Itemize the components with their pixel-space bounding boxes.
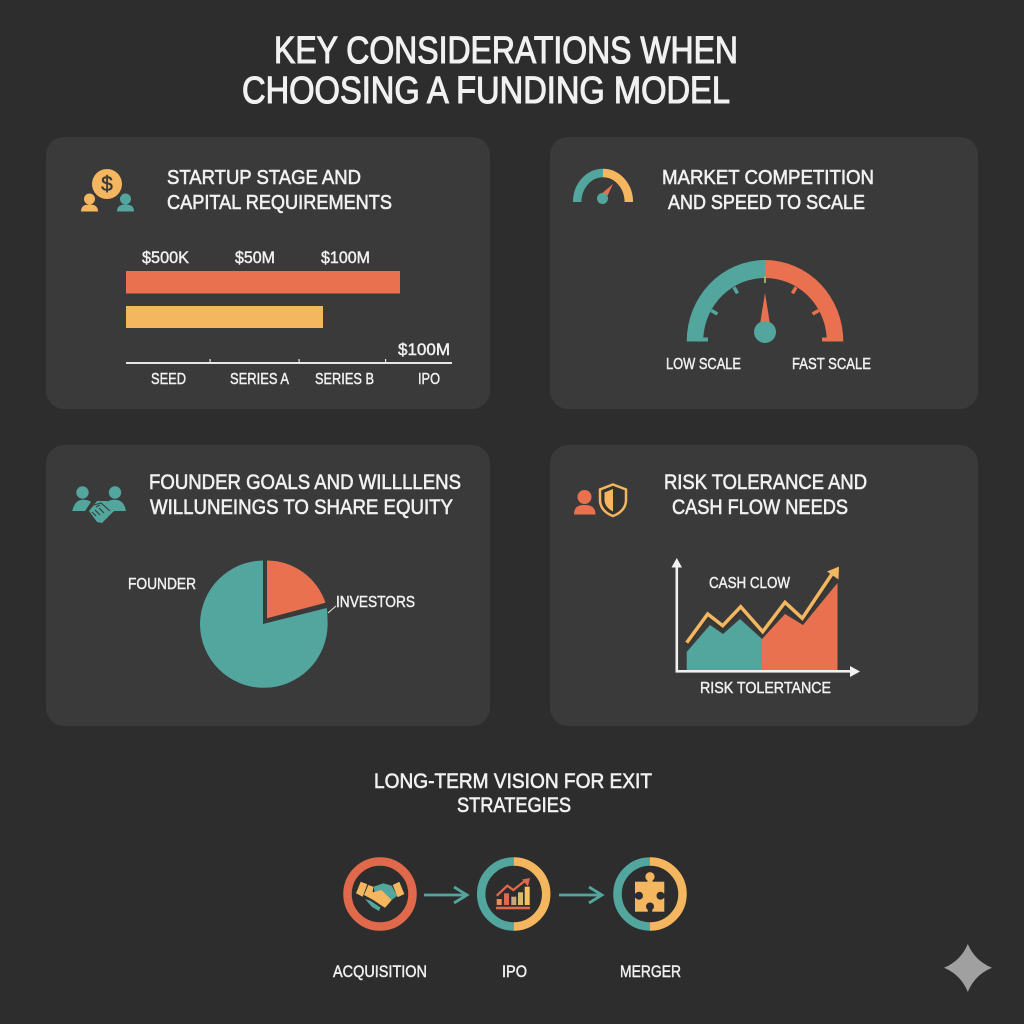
icon: small gauge xyxy=(577,173,629,204)
title xyxy=(242,30,738,112)
title: KEY CONSIDERATIONS WHEN xyxy=(274,30,738,72)
icon: person and shield xyxy=(574,484,626,516)
area chart: cash flow and risk xyxy=(672,558,860,697)
bar chart: capital requirements: $500K xyxy=(142,248,190,267)
bar chart: capital requirements: $100M xyxy=(398,340,450,359)
heading: AND SPEED TO SCALE xyxy=(668,191,865,214)
icon: merger puzzle piece xyxy=(618,862,682,926)
bar chart: capital requirements: SEED xyxy=(151,371,186,388)
panel background xyxy=(550,445,978,726)
bar chart: capital requirements: IPO xyxy=(418,371,440,388)
icon: dollar coin and people: $ xyxy=(101,173,113,196)
heading: FOUNDER GOALS AND WILLLLENS xyxy=(149,471,461,494)
arrow: acquisition to IPO xyxy=(424,887,467,903)
label: merger: MERGER xyxy=(620,963,681,981)
gauge chart: speed to scale: LOW SCALE xyxy=(666,356,741,373)
icon: dollar coin and people xyxy=(81,169,134,212)
heading: WILLUNEINGS TO SHARE EQUITY xyxy=(150,496,453,519)
bar chart: capital requirements: $100M xyxy=(321,248,370,267)
heading xyxy=(662,166,874,214)
area chart: cash flow and risk: RISK TOLERTANCE xyxy=(700,680,831,697)
heading: STARTUP STAGE AND xyxy=(167,166,361,189)
heading: RISK TOLERANCE AND xyxy=(664,471,867,494)
title: CHOOSING A FUNDING MODEL xyxy=(242,70,730,112)
panel: startup stage xyxy=(46,137,490,409)
heading: LONG-TERM VISION FOR EXIT xyxy=(374,770,652,793)
icon: people shaking hands xyxy=(72,486,126,523)
bar chart: capital requirements: $50M xyxy=(235,248,275,267)
founder slice xyxy=(200,560,328,688)
icon: acquisition handshake xyxy=(348,862,412,926)
bar chart: capital requirements xyxy=(126,248,452,388)
gauge chart: speed to scale: FAST SCALE xyxy=(792,356,871,373)
arrow: IPO to merger xyxy=(559,887,602,903)
pie chart: equity split: FOUNDER xyxy=(128,576,196,593)
heading xyxy=(374,770,652,817)
label: acquisition: ACQUISITION xyxy=(333,963,427,981)
icon: IPO growth chart xyxy=(481,862,546,926)
heading: MARKET COMPETITION xyxy=(662,166,874,189)
gauge chart: speed to scale xyxy=(666,260,871,373)
label: IPO: IPO xyxy=(502,963,527,981)
heading: STRATEGIES xyxy=(457,794,571,817)
section: exit strategies xyxy=(333,770,682,981)
heading xyxy=(664,471,867,519)
panel background xyxy=(550,137,978,409)
heading xyxy=(167,166,392,214)
pie chart: equity split: INVESTORS xyxy=(336,594,415,611)
panel background xyxy=(46,137,490,409)
bar chart: capital requirements: SERIES B xyxy=(315,371,374,388)
heading xyxy=(149,471,461,519)
heading: CASH FLOW NEEDS xyxy=(672,496,848,519)
area chart: cash flow and risk: CASH CLOW xyxy=(709,575,791,592)
heading: CAPITAL REQUIREMENTS xyxy=(167,191,392,214)
investors slice xyxy=(267,560,326,618)
bar chart: capital requirements: SERIES A xyxy=(230,371,289,388)
panel: risk tolerance xyxy=(550,445,978,726)
pie chart: equity split xyxy=(128,560,415,688)
icon: sparkle watermark xyxy=(944,944,992,992)
panel background xyxy=(46,445,490,726)
panel: market competition xyxy=(550,137,978,409)
panel: founder goals xyxy=(46,445,490,726)
